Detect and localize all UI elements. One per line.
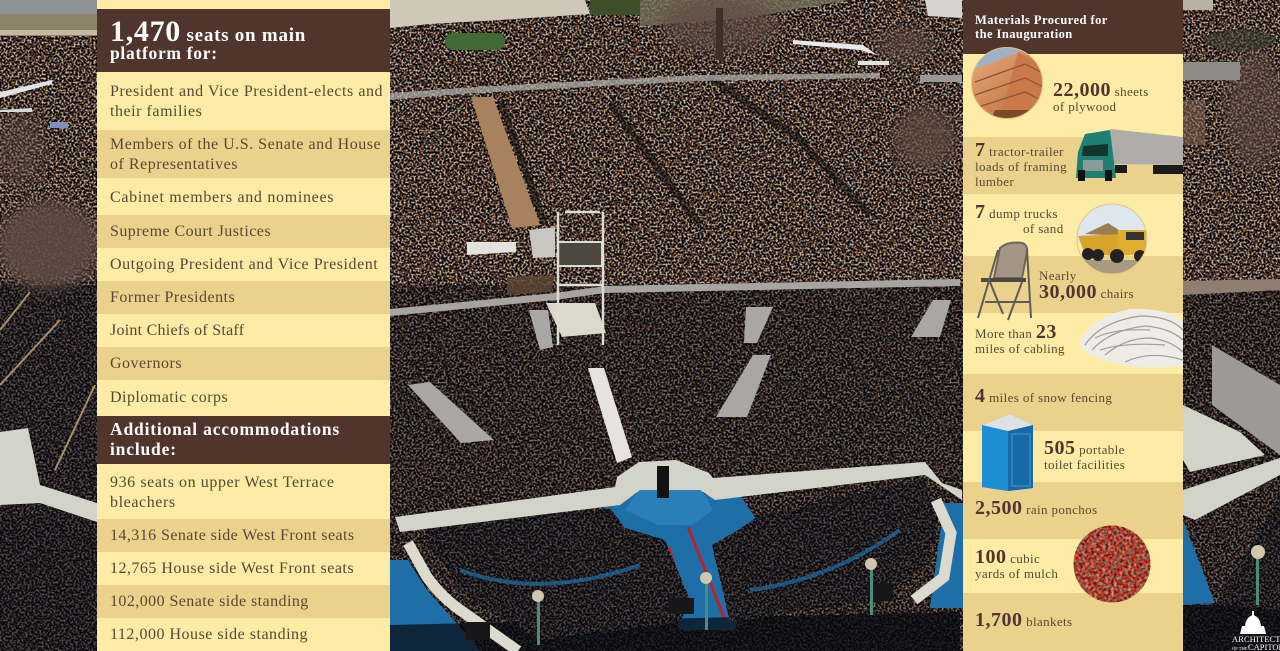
list item: Supreme Court — [97, 215, 390, 248]
heading: 1,470 seats on main platform: platform for: — [110, 43, 218, 63]
text: 1,700 blankets: 1,700 blankets — [975, 609, 1072, 631]
band backgrounds — [963, 137, 1183, 651]
heading: materials procured for the inauguration — [963, 0, 1183, 54]
blue carpet — [390, 495, 1215, 651]
list item: House side seats — [97, 552, 390, 585]
gray aisles — [408, 279, 1280, 443]
logo: Architect of the Capitol — [1232, 611, 1280, 651]
curved white terrace arcs — [408, 500, 951, 651]
logo: Architect of the Capitol: ARCHITECT — [1232, 634, 1280, 644]
heading: 1,470 seats on main platform — [97, 9, 390, 72]
white center aisle — [588, 368, 632, 463]
list item: Outgoing President — [97, 248, 390, 281]
seated guests on platform — [0, 478, 1280, 651]
text: More than 23 miles of cabling: More than 23 — [975, 321, 1057, 343]
list item: Senate standing — [97, 585, 390, 618]
gray tarp wall — [1212, 345, 1280, 455]
list item: Members of Congress: Members of the U.S. Senate and House — [110, 136, 381, 153]
list item: upper West Terrace — [97, 464, 390, 519]
list item: House standing: 112,000 House side standing — [110, 626, 308, 642]
list item: Outgoing President: Outgoing President and Vice President — [110, 256, 378, 272]
list item: Former Presidents — [97, 281, 390, 314]
red carpet — [669, 527, 725, 620]
heading: materials procured for the inauguration: the Inauguration — [975, 27, 1073, 41]
heading: additional accommodations: Additional accommodations — [110, 419, 340, 439]
blue floor showing between seat rows — [460, 530, 900, 590]
text: 100 cubic yards of mulch: yards of mulch — [975, 566, 1058, 581]
list item: President and Vice President-elects — [97, 72, 390, 130]
text: 4 miles of snow fencing: 4 miles of snow fencing — [975, 385, 1112, 407]
speakers on stands — [466, 583, 892, 640]
text: 7 tractor-trailer loads of framing lumber: lumber — [975, 174, 1014, 189]
list item: Joint Chiefs: Joint Chiefs of Staff — [110, 322, 244, 338]
lamp posts — [532, 545, 1265, 645]
text: 7 dump trucks of sand — [975, 201, 1064, 236]
list item: Supreme Court: Supreme Court Justices — [110, 222, 271, 240]
list item: Senate standing: 102,000 Senate side standing — [110, 592, 309, 610]
logo: Architect of the Capitol: OF THE — [1232, 646, 1248, 651]
text: 100 cubic yards of mulch: 100 cubic — [975, 546, 1040, 568]
text: More than 23 miles of cabling — [975, 321, 1065, 356]
list item: upper West Terrace: bleachers — [110, 494, 176, 510]
shade over seated guests — [0, 478, 1280, 651]
list item: Members of Congress: of Representatives — [110, 156, 238, 173]
panel: seating on the main platform — [97, 0, 390, 651]
top lawn and plaza background — [0, 0, 1213, 50]
text: 22,000 sheets of plywood: of plywood — [1053, 99, 1116, 114]
list item: Joint Chiefs — [97, 314, 390, 347]
list item: Cabinet: Cabinet members and nominees — [110, 188, 334, 206]
octagonal speaker platform — [625, 483, 713, 525]
icon: plywood stack — [971, 47, 1183, 602]
list item: upper West Terrace: 936 seats on upper West Terrace — [110, 474, 335, 490]
heading: additional accommodations — [97, 416, 390, 464]
left bleachers — [0, 292, 95, 470]
text: 2,500 rain ponchos: 2,500 rain ponchos — [975, 497, 1097, 519]
list item: Senate side seats — [97, 519, 390, 552]
text: Nearly 30,000 chairs: 30,000 chairs — [1039, 281, 1134, 303]
list item: President and Vice President-elects: President and Vice President-elects and — [110, 83, 383, 100]
heading: additional accommodations: include: — [110, 439, 177, 459]
icon: folding chair — [978, 243, 1031, 320]
list item: President and Vice President-elects: their families — [110, 103, 202, 120]
list item: House standing — [97, 618, 390, 651]
text: 7 tractor-trailer loads of framing lumber — [975, 139, 1067, 189]
heading: 1,470 seats on main platform: 1,470 seats on main — [110, 15, 306, 48]
text: 7 dump trucks of sand: 7 dump trucks — [975, 201, 1058, 223]
observation tower — [546, 212, 606, 345]
icon: mulch circle — [1074, 526, 1150, 602]
dark seams between crowd sections — [500, 77, 870, 225]
photographers platform — [529, 227, 555, 258]
heading: materials procured for the inauguration: Materials Procured for — [975, 12, 1108, 26]
text: 505 portable toilet facilities: 505 portable — [1044, 437, 1125, 459]
list item: Diplomatic corps — [97, 380, 390, 416]
list item: Cabinet — [97, 178, 390, 215]
trees — [0, 0, 1280, 289]
list item: Members of Congress — [97, 130, 390, 178]
balustrade and terrace walls — [0, 405, 1280, 532]
text: 7 tractor-trailer loads of framing lumber: 7 tractor-trailer — [975, 139, 1064, 161]
text: 22,000 sheets of plywood: 22,000 sheets — [1053, 79, 1149, 101]
icon: dump truck — [1075, 203, 1150, 276]
text: 100 cubic yards of mulch — [975, 546, 1058, 581]
panel: materials procured — [963, 0, 1183, 651]
text: More than 23 miles of cabling: miles of cabling — [975, 341, 1065, 356]
icon: portable toilet — [982, 414, 1033, 491]
icon: coil of cable — [1079, 309, 1183, 368]
list item: Governors: Governors — [110, 354, 182, 372]
icon: tractor trailer — [1076, 129, 1183, 181]
list item: Diplomatic corps: Diplomatic corps — [110, 389, 228, 406]
list item: House side seats: 12,765 House side West Front seats — [110, 560, 354, 576]
list item: Senate side seats: 14,316 Senate side West Front seats — [110, 526, 355, 544]
text: Nearly 30,000 chairs: Nearly — [1039, 268, 1077, 283]
text: 7 dump trucks of sand: of sand — [1023, 221, 1064, 236]
lectern figure — [657, 466, 669, 498]
text: 22,000 sheets of plywood — [1053, 79, 1149, 114]
list item: Former Presidents: Former Presidents — [110, 288, 235, 306]
text: 505 portable toilet facilities: toilet facilities — [1044, 457, 1125, 472]
text: 7 tractor-trailer loads of framing lumber: loads of framing — [975, 159, 1067, 174]
text: 505 portable toilet facilities — [1044, 437, 1125, 472]
aisle and railings — [0, 40, 1240, 316]
list item: Governors — [97, 347, 390, 380]
text: Nearly 30,000 chairs — [1039, 268, 1134, 303]
